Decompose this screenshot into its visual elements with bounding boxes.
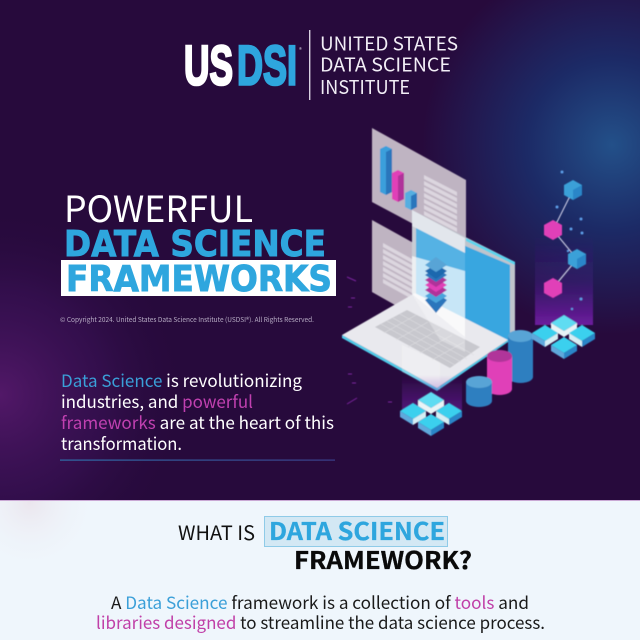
intro paragraph <box>61 367 334 455</box>
intro paragraph: Data Science is revolutionizing <box>61 367 302 392</box>
section heading <box>178 512 472 576</box>
main title: DATA SCIENCE <box>64 224 326 265</box>
section description: libraries designed to streamline the data science process. <box>96 609 545 634</box>
main title: POWERFUL <box>64 181 253 233</box>
intro paragraph: industries, and powerful <box>61 388 253 413</box>
laptop screen <box>412 210 515 342</box>
logo: USDSI: UNITED STATES <box>320 30 458 56</box>
main title <box>61 181 336 300</box>
intro paragraph: transformation. <box>61 430 182 455</box>
lower block beam <box>402 375 462 410</box>
main title: FRAMEWORKS <box>66 259 332 300</box>
logo: USDSI: US <box>184 34 233 96</box>
laptop base <box>342 293 508 391</box>
section: what is a data science framework <box>0 500 640 640</box>
dark background panel <box>0 0 640 501</box>
section description: A Data Science framework is a collection of tools and <box>111 589 529 614</box>
section description <box>96 589 545 634</box>
logo: USDSI: DATA SCIENCE <box>320 50 451 78</box>
back panel: bar chart <box>372 128 466 252</box>
layered stack icon <box>425 257 447 313</box>
section heading: DATA SCIENCE <box>269 512 445 547</box>
intro paragraph: frameworks are at the heart of this <box>61 409 334 434</box>
block cluster: bottom <box>400 392 462 436</box>
circuit sparks <box>347 277 392 404</box>
molecule chain beam <box>535 235 593 325</box>
section heading: WHAT IS <box>178 517 255 546</box>
logo: USDSI <box>184 30 458 100</box>
data cylinders <box>466 330 533 407</box>
glass overlay panel <box>402 210 465 390</box>
logo: USDSI: ® <box>299 45 302 54</box>
copyright line: © Copyright 2024. United States Data Science Institute (USDSI®). All Rights Reserved. <box>60 314 314 324</box>
illustration: laptop and data graphics <box>342 128 595 436</box>
logo: USDSI: DSI <box>237 34 297 96</box>
molecule chain <box>544 170 586 310</box>
section heading: FRAMEWORK? <box>294 541 472 576</box>
back panel: text <box>372 220 466 345</box>
block cluster: right <box>532 315 595 359</box>
logo: USDSI: INSTITUTE <box>320 73 410 100</box>
